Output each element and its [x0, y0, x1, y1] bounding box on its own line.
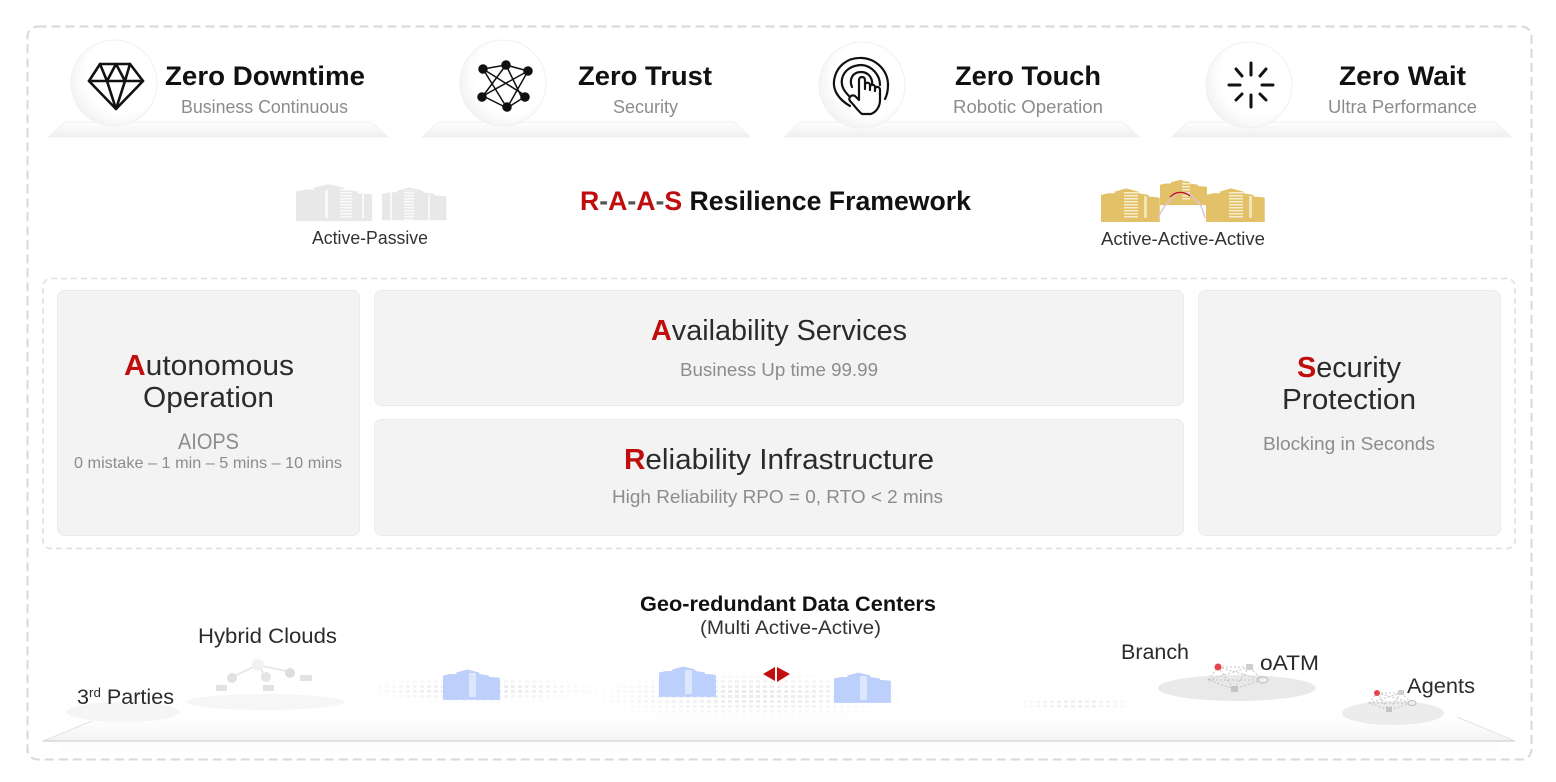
panel: Security Protection	[1198, 290, 1500, 536]
label: 3	[77, 686, 89, 709]
heading line 2: Operation	[143, 382, 274, 414]
panel: Availability Services	[374, 290, 1184, 406]
icon: gold data centers	[1101, 180, 1265, 222]
heading: Geo-redundant Data Centers: Geo-redundant Data Centers	[640, 593, 936, 616]
panel background	[374, 420, 1184, 536]
label: Parties	[101, 686, 174, 709]
label: Active-Passive	[312, 228, 428, 248]
pillar: Zero Touch	[784, 42, 1139, 137]
pillar: Zero Wait	[1172, 42, 1511, 137]
inner dashed frame	[43, 278, 1515, 548]
icon disc	[71, 40, 157, 126]
detail: Business Up time 99.99	[680, 360, 878, 380]
icon: touch	[834, 58, 888, 114]
icon disc	[819, 42, 905, 128]
heading: Autonomous	[124, 350, 294, 382]
link arc	[1158, 192, 1205, 218]
panel background	[1198, 290, 1500, 536]
heading: Zero Wait	[1339, 61, 1466, 91]
heading: Reliability Infrastructure	[624, 444, 934, 476]
diagram: Active-Active-Active	[1101, 180, 1265, 249]
heading: Availability Services	[651, 315, 907, 347]
panel background	[374, 290, 1184, 406]
node: Hybrid Clouds	[186, 625, 344, 710]
node: Branch and oATM	[1121, 641, 1319, 701]
title: R-A-A-S Resilience Framework	[580, 186, 972, 216]
detail: Blocking in Seconds	[1263, 434, 1435, 454]
heading: Security	[1297, 352, 1401, 384]
icon: branch network	[1208, 664, 1268, 692]
label: Branch: Branch	[1121, 641, 1189, 664]
icon: cloud tree	[216, 659, 312, 691]
icon: red link arrows	[763, 667, 790, 682]
pedestal	[422, 122, 750, 137]
icon: grey data centers	[296, 184, 446, 221]
pedestal	[48, 122, 388, 137]
heading line 2: Protection	[1282, 384, 1416, 416]
pedestal	[1172, 122, 1511, 137]
pillar: Zero Trust	[422, 40, 750, 137]
subheading: Security	[613, 97, 678, 117]
label: Active-Active-Active	[1101, 229, 1265, 249]
subheading: Ultra Performance	[1328, 97, 1477, 117]
icon: blue data center right	[834, 673, 891, 703]
ground platform	[43, 712, 1515, 752]
detail: High Reliability RPO = 0, RTO < 2 mins	[612, 487, 943, 507]
pillar: Zero Downtime	[48, 40, 388, 137]
node: 3rd Parties	[66, 685, 180, 722]
subheading: Robotic Operation	[953, 97, 1103, 117]
icon disc	[460, 40, 546, 126]
label: oATM: oATM	[1260, 652, 1319, 675]
pedestal	[784, 122, 1139, 137]
dotted world map	[399, 680, 1117, 711]
node: Agents	[1342, 675, 1475, 725]
heading: Zero Trust	[578, 61, 712, 91]
label: rd	[89, 685, 101, 700]
icon: blue data center left	[443, 670, 500, 700]
subheading: Business Continuous	[181, 97, 348, 117]
icon: spinner	[1229, 63, 1273, 107]
panel background	[58, 290, 360, 536]
icon disc	[1206, 42, 1292, 128]
label: Agents	[1407, 675, 1475, 698]
panel: Reliability Infrastructure	[374, 420, 1184, 536]
platform ellipse	[186, 694, 344, 710]
subheading: (Multi Active-Active)	[700, 618, 881, 639]
icon: agent network	[1369, 690, 1416, 712]
timing text: 0 mistake – 1 min – 5 mins – 10 mins	[74, 455, 342, 472]
icon: network	[478, 61, 532, 111]
AIOPS label: AIOPS	[178, 429, 239, 454]
heading: Zero Downtime	[165, 61, 365, 91]
icon: diamond	[89, 64, 143, 109]
panel: Autonomous Operation	[58, 290, 360, 536]
heading: Zero Touch	[955, 61, 1101, 91]
label: Hybrid Clouds	[198, 625, 337, 648]
platform ellipse	[66, 702, 180, 722]
icon: blue data center centre	[659, 667, 716, 697]
diagram: Active-Passive	[296, 184, 446, 248]
platform ellipse	[1342, 701, 1444, 725]
platform ellipse	[1158, 675, 1316, 701]
